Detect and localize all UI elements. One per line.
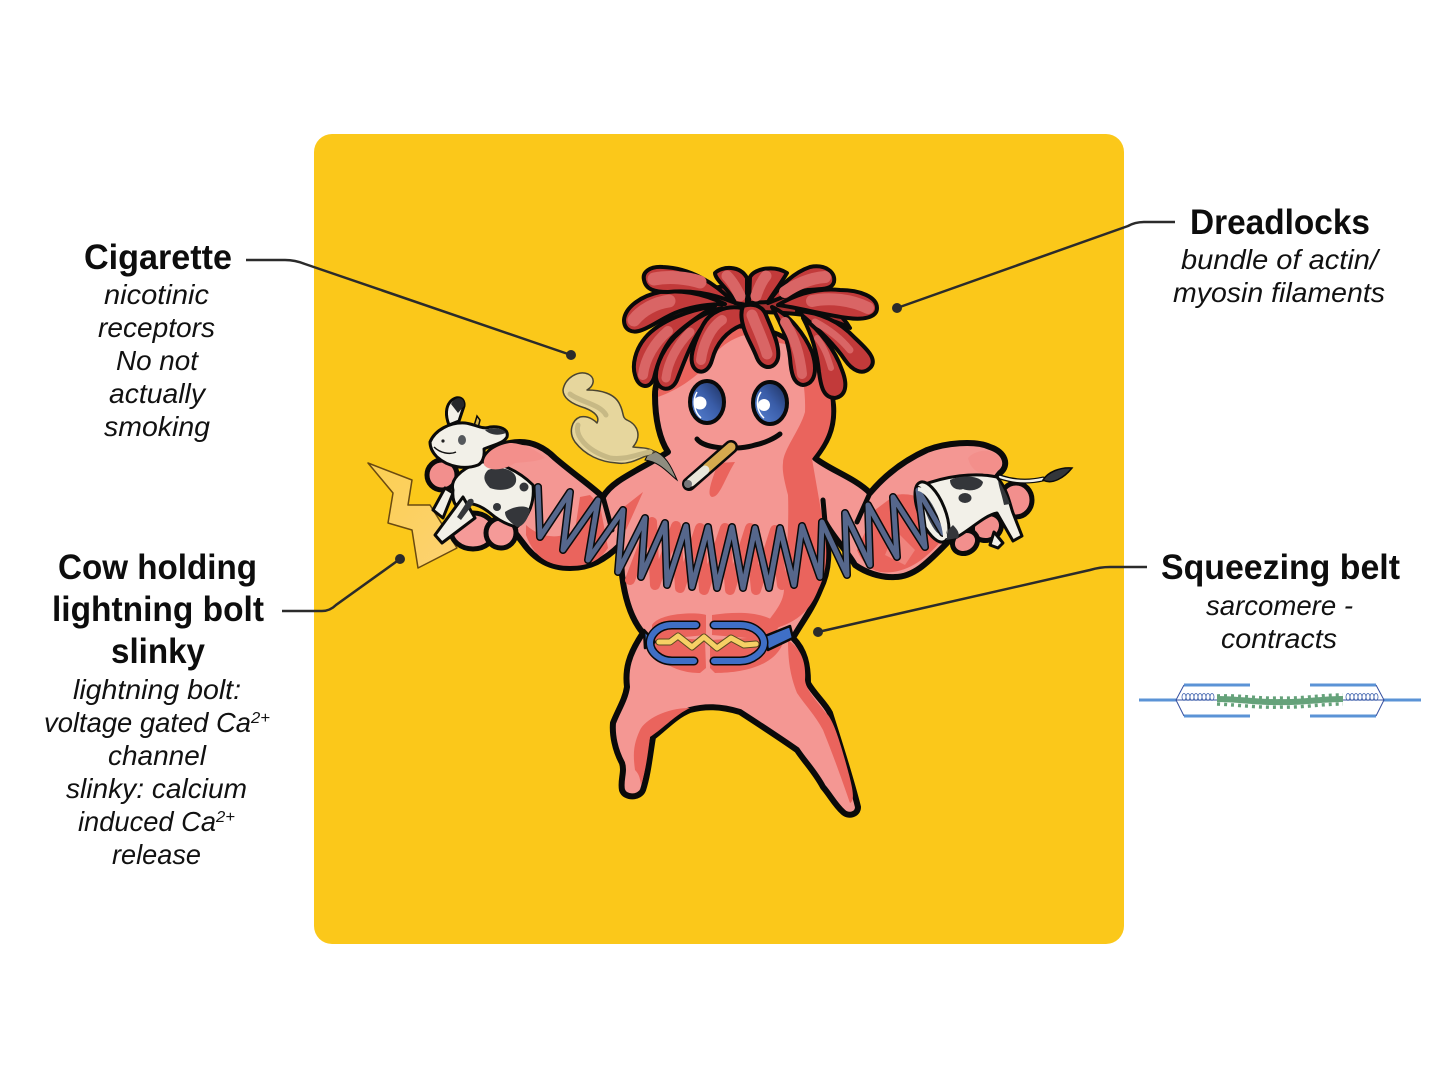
label: dreadlocks: bundle of actin/ bbox=[1181, 244, 1381, 275]
label: cow holding lightning bolt slinky: Cow holding bbox=[58, 548, 257, 587]
coil shadow on torso bbox=[630, 522, 782, 590]
hair: dreadlocks bbox=[624, 266, 877, 398]
label: cow holding lightning bolt slinky: lightning bolt: bbox=[73, 674, 241, 705]
right thumb bbox=[968, 451, 1002, 474]
body bbox=[484, 328, 1005, 815]
label: cow holding lightning bolt slinky: voltage gated Ca bbox=[44, 707, 251, 738]
label: cigarette: nicotinic bbox=[104, 279, 209, 310]
lightning bolt bbox=[368, 463, 457, 568]
smoke bbox=[563, 373, 677, 480]
label: squeezing belt: sarcomere - bbox=[1206, 590, 1353, 621]
label: dreadlocks: myosin filaments bbox=[1173, 277, 1385, 308]
label: cow holding lightning bolt slinky: slinky: calcium bbox=[66, 773, 247, 804]
callout: dreadlocks bbox=[892, 222, 1175, 313]
label: dreadlocks: Dreadlocks bbox=[1190, 203, 1370, 242]
slinky coil bbox=[538, 487, 943, 588]
label: squeezing belt bbox=[1161, 548, 1400, 654]
right fingers bbox=[948, 483, 1032, 558]
label: cigarette: actually bbox=[109, 378, 207, 409]
label: cow holding lightning bolt slinky: lightning bolt bbox=[52, 590, 264, 629]
label: cow holding lightning bolt slinky: slinky bbox=[111, 632, 205, 671]
callout: squeezing belt bbox=[813, 567, 1147, 637]
body shading bbox=[526, 328, 942, 803]
left fingers bbox=[427, 460, 516, 549]
yellow panel bbox=[314, 134, 1124, 944]
icon: sarcomere diagram bbox=[1139, 685, 1421, 716]
label: cow holding lightning bolt slinky bbox=[44, 548, 270, 870]
eyes bbox=[690, 381, 787, 424]
label: squeezing belt: contracts bbox=[1221, 623, 1337, 654]
label: cow holding lightning bolt slinky: 2+ bbox=[215, 809, 235, 826]
label: cow holding lightning bolt slinky: release bbox=[112, 839, 201, 870]
cow rim over coil bbox=[918, 489, 945, 538]
left thumb bbox=[484, 443, 545, 469]
label: cigarette: Cigarette bbox=[84, 238, 232, 277]
label: squeezing belt: Squeezing belt bbox=[1161, 548, 1400, 587]
label: cigarette bbox=[84, 238, 232, 442]
icon: cow holding lightning bolt bbox=[430, 398, 533, 543]
label: cigarette: receptors bbox=[98, 312, 215, 343]
arm creases bbox=[603, 493, 870, 530]
callout: cow holding lightning bolt bbox=[282, 554, 405, 611]
light arm highlights bbox=[826, 490, 915, 565]
label: cow holding lightning bolt slinky: induced Ca bbox=[78, 806, 216, 837]
character illustration bbox=[368, 266, 1072, 815]
label: dreadlocks bbox=[1173, 203, 1385, 308]
label: cigarette: No not bbox=[116, 345, 199, 376]
callout: cigarette bbox=[246, 260, 576, 360]
cigarette bbox=[684, 447, 731, 488]
mouth bbox=[697, 434, 780, 448]
label: cow holding lightning bolt slinky: channel bbox=[108, 740, 207, 771]
label: cigarette: smoking bbox=[104, 411, 210, 442]
label: cow holding lightning bolt slinky: 2+ bbox=[250, 710, 270, 727]
icon: cow in right hand bbox=[908, 468, 1072, 548]
squeezing belt bbox=[644, 625, 793, 661]
